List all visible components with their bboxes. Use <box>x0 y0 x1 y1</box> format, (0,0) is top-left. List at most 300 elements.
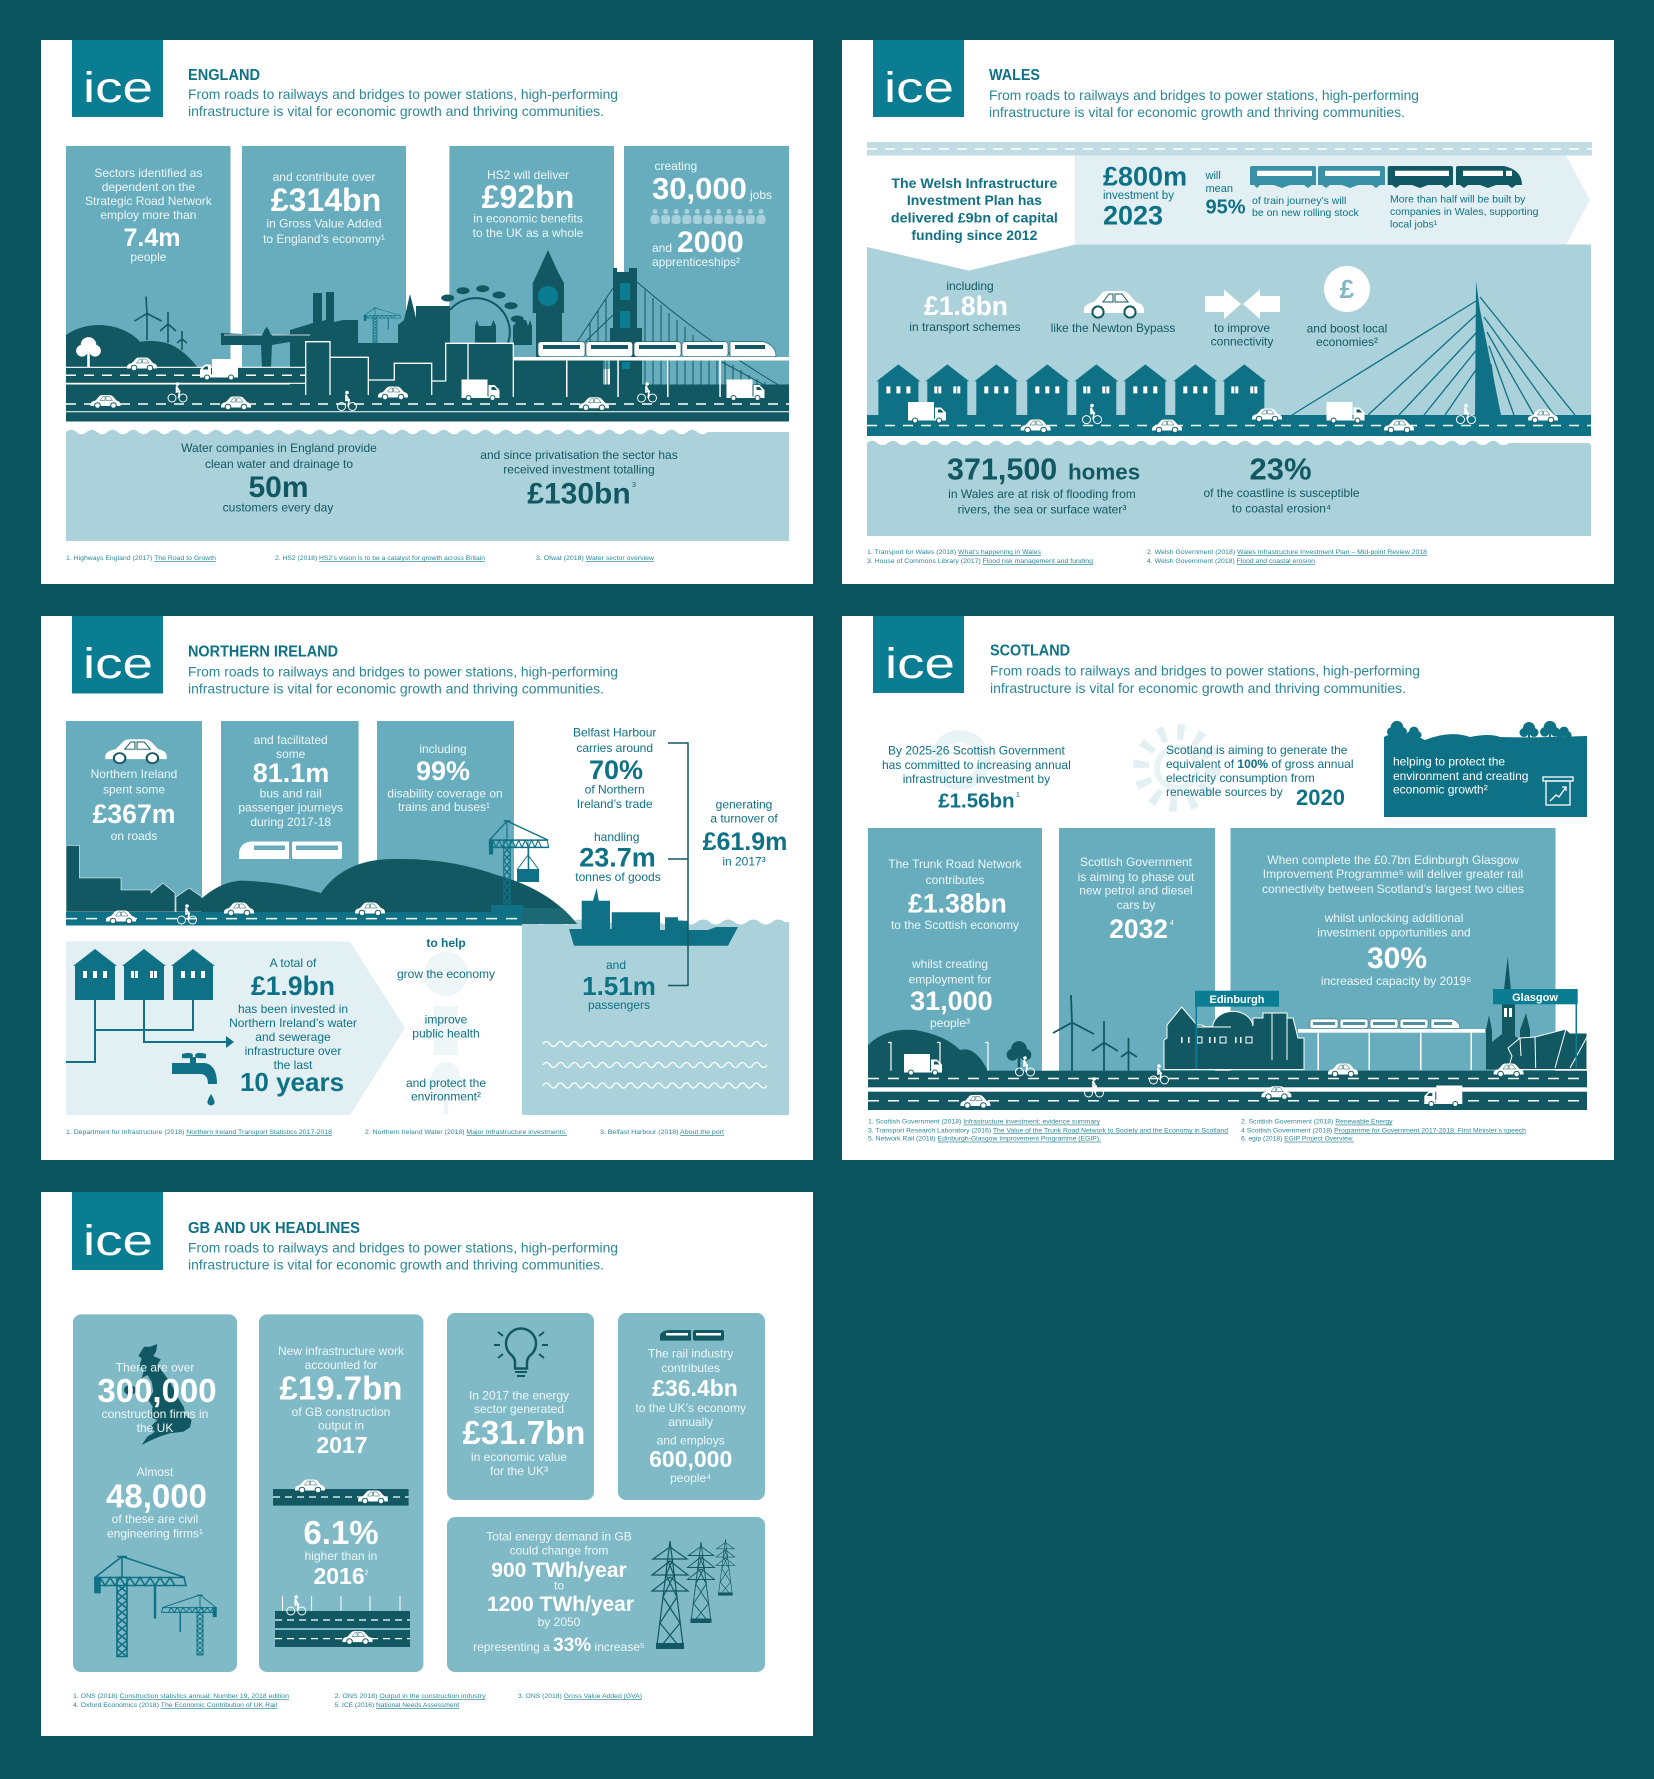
stat box: disability coverage: including <box>419 742 467 756</box>
stat box: gross value added: to England’s economy¹ <box>263 232 385 246</box>
stat box: gross value added: £314bn <box>271 182 381 218</box>
stat box: Edinburgh Glasgow programme: 30% <box>1367 942 1427 975</box>
stat box: road network employment: people <box>130 250 167 264</box>
water investment stat: received investment totalling <box>503 462 655 476</box>
Glasgow sign: Glasgow <box>1512 992 1558 1004</box>
stat: transport schemes <box>909 279 1021 334</box>
95 percent stat: of train journey’s will <box>1252 195 1346 207</box>
stat box: jobs: 2000 <box>677 226 744 259</box>
card: infrastructure work: £19.7bn <box>280 1370 402 1406</box>
stat box: petrol and diesel phase-out: cars by <box>1117 898 1155 912</box>
card: construction firms: Almost <box>137 1465 174 1479</box>
stat box: petrol and diesel phase-out: new petrol and diesel <box>1079 884 1193 898</box>
intro text <box>188 86 618 119</box>
London Eye <box>441 285 532 345</box>
logo: ice <box>72 1192 163 1270</box>
water customers stat: customers every day <box>223 501 333 515</box>
footnotes: Northern Ireland <box>66 1129 724 1136</box>
renewable energy text with faded sun: electricity consumption from <box>1166 771 1315 785</box>
passengers stat: passengers <box>588 998 650 1012</box>
Belfast Harbour text: of Northern <box>585 783 645 797</box>
upper road <box>66 367 306 384</box>
footnotes: GB and UK: 4. Oxford Economics (2018) The Economic Contribution of UK Rail <box>73 1702 277 1709</box>
card: rail industry: contributes <box>661 1361 720 1375</box>
environment box: helping to protect the <box>1393 755 1505 769</box>
95 percent stat <box>1204 170 1360 219</box>
stat box: Edinburgh Glasgow programme: investment opportunities and <box>1317 925 1471 939</box>
illustration: England skyline and roads <box>66 250 789 422</box>
stat box: passenger journeys: during 2017-18 <box>250 815 331 829</box>
card: rail industry: £36.4bn <box>652 1375 738 1401</box>
card: infrastructure work: of GB construction <box>292 1405 390 1419</box>
water panel: England <box>66 430 789 541</box>
stat box: road network employment <box>66 146 230 369</box>
local jobs text: local jobs¹ <box>1390 218 1438 230</box>
viaduct and train <box>1298 1019 1485 1070</box>
stat box: passenger journeys: some <box>276 747 306 761</box>
intro text <box>188 1240 618 1273</box>
card: energy sector: in economic value <box>471 1450 567 1464</box>
water investment stat <box>480 448 678 511</box>
list: to help: improve <box>425 1013 468 1027</box>
water investment stat: and since privatisation the sector has <box>480 448 678 462</box>
stat box: trunk road network: people³ <box>930 1016 970 1030</box>
annual investment text: has committed to increasing annual <box>882 758 1071 772</box>
95 percent stat: will <box>1204 170 1221 182</box>
stat box: road network employment: Strategic Road Network <box>85 194 213 208</box>
investment text: Northern Ireland’s water <box>229 1016 357 1030</box>
icon: converging arrows with connectivity label: connectivity <box>1211 334 1273 348</box>
local jobs text: companies in Wales, supporting <box>1390 206 1539 218</box>
icon: tap <box>172 1053 217 1106</box>
houses <box>73 949 215 1000</box>
roads with vehicles <box>868 1054 1587 1110</box>
stat box: HS2: HS2 will deliver <box>487 168 569 182</box>
stat box: passenger journeys: and facilitated <box>254 733 328 747</box>
stat box: petrol and diesel phase-out <box>1059 828 1215 1071</box>
trees <box>1387 721 1572 745</box>
Belfast Harbour text: Belfast Harbour <box>573 726 656 740</box>
footnotes: GB and UK <box>73 1693 642 1709</box>
footnotes: Northern Ireland: 2. Northern Ireland Water (2018) Major Infrastructure investments. <box>365 1129 567 1136</box>
stat box: road network employment: employ more than <box>100 208 196 222</box>
stat box: trunk road network: employment for <box>909 973 991 987</box>
card: rail industry: annually <box>668 1415 713 1429</box>
stat box: HS2: to the UK as a whole <box>473 226 584 240</box>
logo: ice: ice <box>83 1217 153 1265</box>
icon: chart board <box>1543 777 1573 805</box>
coastal erosion stat: of the coastline is susceptible <box>1203 486 1360 500</box>
stat box: jobs <box>624 146 789 388</box>
tonnes of goods stat <box>575 830 661 884</box>
tonnes of goods stat: tonnes of goods <box>575 870 661 884</box>
suspension bridge <box>514 268 782 387</box>
list: to help: to help <box>426 936 466 950</box>
investment text <box>229 956 357 1097</box>
card: rail industry: and employs <box>657 1434 725 1448</box>
Edinburgh sign: Edinburgh <box>1210 994 1265 1006</box>
card: energy sector: In 2017 the energy <box>469 1388 569 1402</box>
stat box: petrol and diesel phase-out: 4 <box>1170 920 1174 927</box>
intro text: infrastructure is vital for economic growth and thriving communities. <box>990 680 1406 696</box>
card: construction firms: engineering firms¹ <box>107 1527 203 1541</box>
investment text: £1.9bn <box>251 971 335 1001</box>
icon: converging arrows with connectivity label: to improve <box>1214 321 1270 335</box>
row of houses <box>876 364 1266 415</box>
icon: pound coin with local economies label: and boost local <box>1307 321 1387 335</box>
coastal erosion stat <box>1203 452 1360 516</box>
card: energy demand: representing a 33% increase⁵ <box>473 1635 645 1656</box>
turnover stat: a turnover of <box>710 812 778 826</box>
logo: ice: ice <box>884 64 954 112</box>
Big Ben <box>533 250 564 369</box>
card: rail industry: The rail industry <box>648 1347 733 1361</box>
stat box: jobs: jobs <box>749 188 772 202</box>
environment box <box>1384 721 1587 817</box>
stat box: road network employment: Sectors identified as <box>94 166 202 180</box>
lower road <box>66 384 789 422</box>
stat box: roads spending: £367m <box>92 799 176 829</box>
stat box: trunk road network: whilst creating <box>911 957 988 971</box>
footnotes: England <box>66 555 654 562</box>
investment text: 10 years <box>240 1067 344 1097</box>
card: energy demand: by 2050 <box>538 1615 581 1629</box>
heading: Northern Ireland: NORTHERN IRELAND <box>188 644 338 660</box>
stat box: passenger journeys <box>221 721 359 912</box>
stat box: Edinburgh Glasgow programme: Improvement Programme⁵ will deliver greater rail <box>1263 867 1523 881</box>
Edinburgh skyline <box>1164 1007 1304 1070</box>
footnotes: Scotland: 6. egip (2018) EGIP Project Overview. <box>1241 1136 1354 1143</box>
heading: England: ENGLAND <box>188 67 260 84</box>
Angel of the North <box>221 327 312 368</box>
annual investment text: By 2025-26 Scottish Government <box>888 744 1065 758</box>
card: energy sector: £31.7bn <box>463 1414 585 1451</box>
stat box: jobs: 30,000 <box>652 171 747 206</box>
panel: England <box>41 40 813 584</box>
investment text: infrastructure over <box>245 1044 341 1058</box>
footnotes: Scotland: 3. Transport Research Laboratory (2016) The Value of the Trunk Road Network to Society and the Economy in Scotland <box>868 1127 1228 1134</box>
footnotes: England: 2. HS2 (2018) HS2’s vision is to be a catalyst for growth across Britain <box>275 555 485 562</box>
footnotes: Scotland: 5. Network Rail (2018) Edinburgh-Glasgow Improvement Programme (EGIP). <box>868 1136 1101 1143</box>
pipes <box>66 1000 228 1062</box>
card: energy sector: sector generated <box>474 1402 564 1416</box>
footnotes: Wales <box>867 549 1427 565</box>
icon: train <box>660 1330 724 1341</box>
stepped building outlines <box>306 342 513 397</box>
footnotes: England: 1. Highways England (2017) The Road to Growth <box>66 555 216 562</box>
renewable energy text with faded sun <box>1141 732 1353 810</box>
annual investment text <box>882 736 1071 812</box>
icon: train <box>239 842 342 859</box>
stat box: disability coverage: 99% <box>416 756 470 786</box>
investment text: and sewerage <box>255 1030 331 1044</box>
illustration: town and hills <box>66 846 577 924</box>
intro text <box>188 664 618 697</box>
list: to help <box>397 936 495 1115</box>
intro text <box>989 87 1419 120</box>
panel: GB and UK headlines <box>41 1192 813 1736</box>
stat box: trunk road network: to the Scottish economy <box>891 918 1019 932</box>
flood risk stat: homes <box>1068 460 1140 485</box>
turnover stat: generating <box>716 798 772 812</box>
icon: converging arrows with connectivity label <box>1205 290 1280 348</box>
environment box: environment and creating <box>1393 769 1528 783</box>
card: energy demand: could change from <box>510 1544 608 1558</box>
turnover stat <box>703 798 787 868</box>
road vehicles <box>90 358 764 410</box>
card: rail industry: to the UK’s economy <box>635 1401 746 1415</box>
flood risk stat: in Wales are at risk of flooding from <box>948 487 1136 501</box>
footnotes: GB and UK: 3. ONS (2018) Gross Value Added (GVA) <box>518 1693 642 1700</box>
stat box: HS2: £92bn <box>482 179 574 215</box>
stat box: roads spending <box>66 721 202 912</box>
headline: Welsh Infrastructure Investment Plan: funding since 2012 <box>911 227 1038 243</box>
train <box>1310 1019 1460 1028</box>
footnotes: Wales: 4. Welsh Government (2018) Flood and coastal erosion <box>1147 558 1315 565</box>
stat box: gross value added: and contribute over <box>273 170 375 184</box>
intro text: infrastructure is vital for economic growth and thriving communities. <box>188 103 604 119</box>
stat box: Edinburgh Glasgow programme: connectivity between Scotland’s largest two cities <box>1262 882 1524 896</box>
95 percent stat: mean <box>1206 183 1233 195</box>
icon: UK map <box>124 1344 192 1445</box>
stat box: passenger journeys: bus and rail <box>260 787 322 801</box>
95 percent stat: 95% <box>1206 197 1246 219</box>
factory and city silhouettes <box>290 292 514 385</box>
Belfast Harbour text: 70% <box>589 755 643 785</box>
stat: transport schemes: £1.8bn <box>924 291 1008 321</box>
footnotes: Wales: 1. Transport for Wales (2018) What’s happening in Wales <box>867 549 1042 556</box>
card: energy sector <box>447 1313 594 1500</box>
stat box: disability coverage: trains and buses¹ <box>398 800 490 814</box>
investment figure <box>1103 162 1187 230</box>
icon: car with Newton Bypass label: like the Newton Bypass <box>1051 321 1175 335</box>
card: rail industry: people⁴ <box>670 1471 711 1485</box>
water panel: Wales <box>867 441 1591 536</box>
stat box: HS2: in economic benefits <box>473 212 583 226</box>
footnotes: GB and UK: 1. ONS (2018) Construction statistics annual: Number 19, 2018 edition <box>73 1693 289 1700</box>
logo: ice: ice <box>83 640 153 688</box>
water customers stat: clean water and drainage to <box>205 457 353 471</box>
stat box: petrol and diesel phase-out: Scottish Government <box>1080 855 1193 869</box>
heading: Scotland: SCOTLAND <box>990 642 1070 659</box>
road with vehicles <box>867 402 1591 436</box>
card: infrastructure work: accounted for <box>305 1358 377 1372</box>
crane <box>364 308 401 343</box>
tonnes of goods stat: 23.7m <box>579 843 656 873</box>
card: construction firms: 300,000 <box>97 1372 217 1409</box>
card: construction firms: the UK <box>137 1421 173 1435</box>
card: construction firms: of these are civil <box>112 1512 198 1526</box>
turnover stat: £61.9m <box>703 828 787 856</box>
intro text <box>990 662 1420 696</box>
Belfast Harbour text: Ireland’s trade <box>577 797 653 811</box>
road with vehicles <box>66 902 522 926</box>
stat box: Edinburgh Glasgow programme: whilst unlocking additional <box>1324 911 1463 925</box>
logo: ice <box>873 40 964 117</box>
card: infrastructure work: 2 <box>365 1570 369 1577</box>
intro text: From roads to railways and bridges to power stations, high-performing <box>188 1240 618 1256</box>
logo: ice <box>72 40 163 117</box>
footnotes: GB and UK: 5. ICE (2016) National Needs Assessment <box>335 1702 459 1709</box>
stat box: road network employment: 7.4m <box>124 224 180 252</box>
water customers stat: Water companies in England provide <box>181 441 377 455</box>
bracket <box>668 743 688 986</box>
water investment stat: £130bn <box>527 478 631 511</box>
icon: electricity pylons <box>652 1539 735 1649</box>
card: energy demand: 1200 TWh/year <box>487 1593 634 1616</box>
annual investment text: £1.56bn <box>938 789 1015 812</box>
panel: Wales <box>842 40 1614 584</box>
stat box: trunk road network: 31,000 <box>910 986 993 1016</box>
card: infrastructure work: output in <box>318 1419 364 1433</box>
investment text: A total of <box>270 956 317 970</box>
crane with cargo <box>489 821 549 912</box>
intro text: From roads to railways and bridges to power stations, high-performing <box>188 86 618 102</box>
card: energy demand: to <box>554 1579 564 1593</box>
list: to help: environment² <box>411 1090 481 1104</box>
investment figure: 2023 <box>1103 200 1163 230</box>
footnotes: GB and UK: 2. ONS 2018) Output in the construction industry <box>335 1693 486 1700</box>
investment figure: £800m <box>1103 162 1187 192</box>
heading: GB and UK headlines: GB AND UK HEADLINES <box>188 1220 360 1237</box>
renewable energy text with faded sun: equivalent of 100% of gross annual <box>1166 757 1353 771</box>
95 percent stat: be on new rolling stock <box>1252 207 1360 219</box>
headline: Welsh Infrastructure Investment Plan: The Welsh Infrastructure <box>891 175 1058 191</box>
stat box: jobs: creating <box>654 159 697 173</box>
panel: Northern Ireland <box>41 616 813 1160</box>
hill, lamps and tree <box>868 1030 1031 1071</box>
icon: train <box>1250 166 1522 188</box>
icon: pound coin with local economies label <box>1307 266 1387 349</box>
list: to help: grow the economy <box>397 967 495 981</box>
stat box: gross value added: in Gross Value Added <box>266 216 382 230</box>
intro text: From roads to railways and bridges to power stations, high-performing <box>990 662 1420 678</box>
road with cars <box>273 1480 409 1506</box>
stat box: jobs: and <box>652 241 672 255</box>
icon: row of people <box>650 209 766 224</box>
footnotes: Scotland <box>868 1119 1526 1143</box>
footnotes: Wales: 2. Welsh Government (2018) Wales Infrastructure Investment Plan – Mid-point Review 2018 <box>1147 549 1427 556</box>
stat box: Edinburgh Glasgow programme <box>1230 828 1556 1071</box>
panel: Scotland <box>842 616 1614 1160</box>
Glasgow sign <box>1493 989 1578 1069</box>
local jobs text <box>1390 194 1539 230</box>
top road strip <box>867 142 1592 156</box>
Edinburgh sign <box>1195 991 1279 1069</box>
local jobs text: More than half will be built by <box>1390 194 1526 206</box>
stat box: passenger journeys: 81.1m <box>253 758 329 788</box>
card: energy demand: 900 TWh/year <box>491 1559 627 1582</box>
footnotes: Northern Ireland: 1. Department for Infrastructure (2018) Northern Ireland Transport Statistics 2017-2018 <box>66 1129 332 1136</box>
light panel with pointer <box>867 244 1591 415</box>
card: infrastructure work: 2017 <box>316 1432 368 1458</box>
card: infrastructure work: New infrastructure work <box>278 1344 405 1358</box>
water investment stat: 3 <box>632 482 636 489</box>
faded icons <box>423 952 469 1115</box>
logo: ice: ice <box>885 640 955 688</box>
investment text: the last <box>274 1058 313 1072</box>
stat box: road network employment: dependent on the <box>102 180 195 194</box>
arrow band: rolling stock investment <box>1075 156 1590 244</box>
footnotes: Northern Ireland: 3. Belfast Harbour (2018) About the port <box>600 1129 724 1136</box>
footnotes: Scotland: 4 Scottish Government (2018) Programme for Government 2017-2018: First Minister’s speech <box>1241 1127 1526 1134</box>
card: rail industry <box>618 1313 765 1500</box>
card: construction firms: construction firms in <box>102 1407 208 1421</box>
card: rail industry: 600,000 <box>649 1446 732 1472</box>
stat box: disability coverage <box>377 721 514 912</box>
stat box: Edinburgh Glasgow programme: When complete the £0.7bn Edinburgh Glasgow <box>1267 853 1519 867</box>
stat box: trunk road network: £1.38bn <box>908 888 1007 918</box>
headline: Welsh Infrastructure Investment Plan: Investment Plan has <box>907 192 1042 208</box>
stat box: petrol and diesel phase-out: 2032 <box>1109 914 1168 944</box>
ship <box>569 888 738 946</box>
logo: ice <box>873 616 964 693</box>
coastal erosion stat: 23% <box>1249 452 1312 487</box>
icon: pound coin with local economies label: economies² <box>1316 335 1378 349</box>
intro text: infrastructure is vital for economic growth and thriving communities. <box>989 104 1405 120</box>
passengers stat: 1.51m <box>582 971 656 1001</box>
pipe arrowhead <box>226 1036 234 1048</box>
stat: transport schemes: including <box>946 279 994 293</box>
annual investment text: 1 <box>1016 792 1020 799</box>
renewable energy text with faded sun: 2020 <box>1296 785 1345 810</box>
intro text: From roads to railways and bridges to power stations, high-performing <box>188 664 618 680</box>
icon: pound coin with local economies label: £ <box>1340 274 1355 304</box>
renewable energy text with faded sun: renewable sources by <box>1166 785 1283 799</box>
stat box: trunk road network: contributes <box>926 873 984 887</box>
renewable energy text with faded sun: Scotland is aiming to generate the <box>1166 743 1348 757</box>
footnotes: Scotland: 1. Scottish Government (2018) Infrastructure investment: evidence summary <box>868 1119 1101 1126</box>
stat box: roads spending: Northern Ireland <box>91 767 177 781</box>
Belfast Harbour text: carries around <box>576 741 653 755</box>
stat box: trunk road network <box>868 828 1042 1071</box>
stat box: disability coverage: disability coverage on <box>387 787 503 801</box>
Glasgow skyline <box>1486 957 1587 1070</box>
icon: cranes <box>95 1556 216 1656</box>
intro text: infrastructure is vital for economic growth and thriving communities. <box>188 1257 604 1273</box>
annual investment text: infrastructure investment by <box>903 772 1050 786</box>
logo: ice <box>72 616 163 694</box>
list: to help: and protect the <box>406 1076 486 1090</box>
card: energy demand <box>447 1517 765 1672</box>
headline: Welsh Infrastructure Investment Plan <box>891 175 1058 243</box>
cable-stayed bridge <box>1292 281 1575 415</box>
heading: Wales: WALES <box>989 67 1040 84</box>
card: construction firms: 48,000 <box>106 1477 207 1514</box>
footnotes: England: 3. Ofwat (2018) Water sector overview <box>536 555 654 562</box>
headline: Welsh Infrastructure Investment Plan: delivered £9bn of capital <box>891 210 1058 226</box>
stat box: trunk road network: The Trunk Road Network <box>888 857 1023 871</box>
stat box: Edinburgh Glasgow programme: increased capacity by 2019⁶ <box>1321 974 1471 988</box>
footnotes: Scotland: 2. Scottish Government (2018) Renewable Energy <box>1241 1119 1393 1126</box>
intro text: infrastructure is vital for economic growth and thriving communities. <box>188 681 604 697</box>
arrow panel: water investment <box>66 942 405 1115</box>
wind turbines <box>1053 995 1137 1071</box>
harbour water <box>522 920 789 1115</box>
card: energy sector: for the UK³ <box>490 1464 548 1478</box>
stat box: passenger journeys: passenger journeys <box>238 801 343 815</box>
footnotes: Wales: 3. House of Commons Library (2017) Flood risk management and funding <box>867 558 1093 565</box>
stat: transport schemes: in transport schemes <box>909 320 1021 334</box>
logo: ice: ice <box>83 64 153 112</box>
hill with wind turbines <box>66 296 198 368</box>
water customers stat <box>181 441 377 515</box>
investment text: has been invested in <box>238 1002 348 1016</box>
tonnes of goods stat: handling <box>594 830 639 844</box>
viaduct <box>514 357 789 397</box>
water customers stat: 50m <box>248 471 309 504</box>
environment box: economic growth² <box>1393 783 1488 797</box>
